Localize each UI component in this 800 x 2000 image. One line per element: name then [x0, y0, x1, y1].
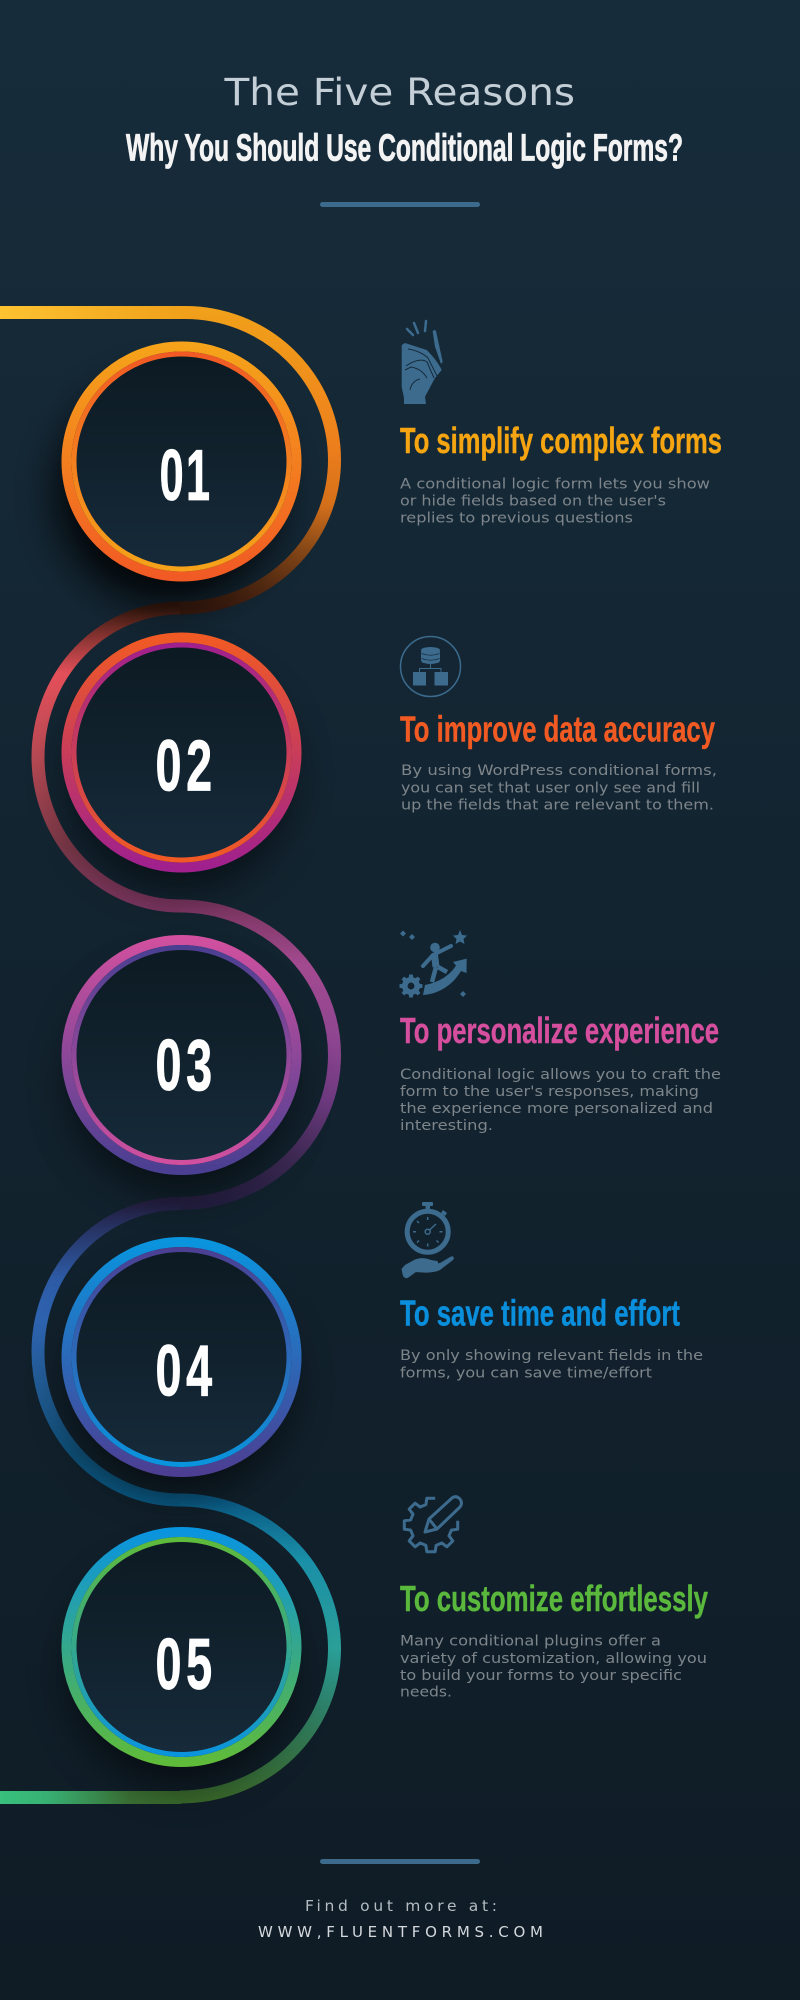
- text block: needs.: [400, 1684, 452, 1700]
- panel: reason 2: [400, 636, 717, 814]
- panel: reason 3: [400, 930, 721, 1134]
- text block: you can set that user only see and fill: [401, 780, 700, 796]
- text block: By only showing relevant fields in the: [400, 1348, 703, 1364]
- number 04: 04: [156, 1330, 217, 1411]
- text block: replies to previous questions: [400, 510, 633, 526]
- text block: or hide fields based on the user's: [400, 494, 666, 510]
- number 02: 02: [156, 725, 217, 806]
- title: [126, 71, 683, 170]
- circle 05: [66, 1532, 296, 1785]
- text block: up the fields that are relevant to them.: [401, 798, 714, 814]
- text block: [400, 1067, 721, 1134]
- text block: [401, 763, 717, 814]
- number 03: 03: [156, 1025, 217, 1105]
- divider: footer: [320, 1859, 480, 1864]
- winding gradient path: [0, 312, 334, 1798]
- icon: gear with pencil: [404, 1497, 462, 1552]
- circle 04: [66, 1242, 296, 1495]
- panel: reason 4: [400, 1202, 703, 1382]
- text block: Conditional logic allows you to craft the: [400, 1067, 721, 1083]
- text block: forms, you can save time/effort: [400, 1366, 652, 1382]
- icon: stopwatch over hand: [402, 1202, 454, 1278]
- circle 01: [56, 346, 296, 604]
- heading: To save time and effort: [400, 1292, 680, 1334]
- footer: WWW,FLUENTFORMS.COM: [258, 1923, 543, 1941]
- text block: interesting.: [400, 1118, 493, 1134]
- title: The Five Reasons: [223, 71, 575, 114]
- footer: Find out more at:: [305, 1897, 497, 1915]
- text block: to build your forms to your specific: [400, 1668, 682, 1684]
- panel: reason 5: [400, 1497, 708, 1700]
- text block: Many conditional plugins offer a: [400, 1634, 661, 1650]
- text block: [400, 1634, 707, 1700]
- icon: database and windows: [400, 636, 460, 696]
- icon: climber with gear and star: [400, 930, 467, 997]
- circle 02: [66, 638, 296, 890]
- circle 03: [66, 940, 296, 1193]
- number 05: 05: [156, 1624, 217, 1704]
- text block: [400, 476, 710, 526]
- icon: hand snapping fingers: [402, 321, 443, 404]
- divider: header: [320, 202, 480, 207]
- footer: [258, 1897, 543, 1941]
- text block: the experience more personalized and: [400, 1101, 713, 1117]
- number 01: 01: [160, 435, 212, 516]
- panel: reason 1: [400, 321, 722, 526]
- text block: A conditional logic form lets you show: [400, 476, 710, 492]
- text block: [400, 1348, 703, 1382]
- text block: variety of customization, allowing you: [400, 1651, 707, 1667]
- text block: By using WordPress conditional forms,: [401, 763, 717, 779]
- text block: form to the user's responses, making: [400, 1084, 699, 1100]
